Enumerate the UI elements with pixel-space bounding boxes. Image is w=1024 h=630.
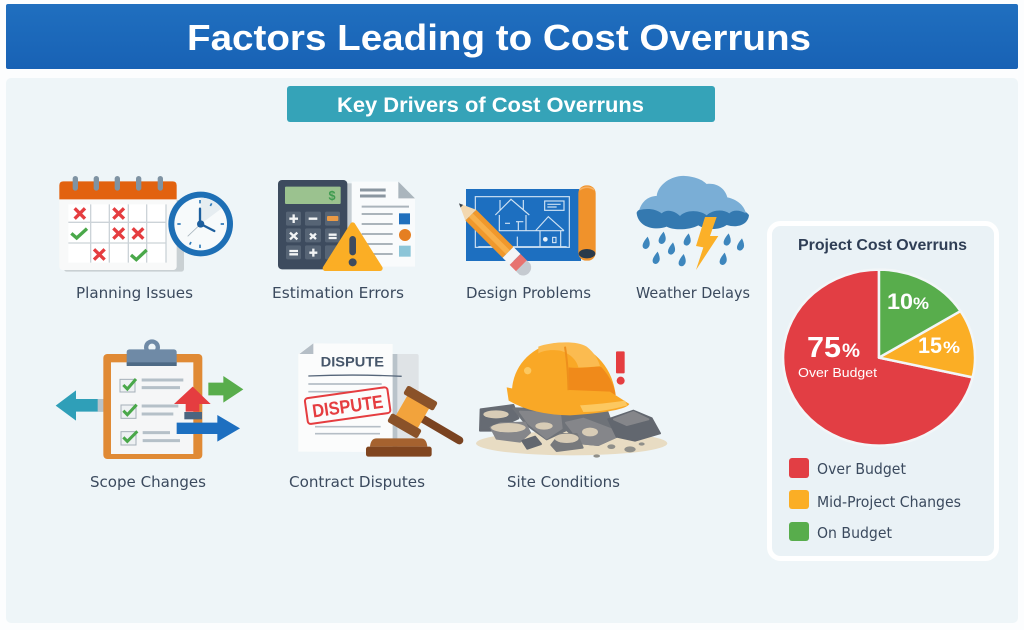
- panel: project cost overruns: [770, 224, 996, 558]
- value: 15%: [918, 333, 960, 358]
- value: 10%: 10: [887, 289, 913, 314]
- label: site conditions: Site Conditions: [507, 473, 620, 491]
- label: scope changes: Scope Changes: [90, 473, 206, 491]
- icon: contract disputes document and gavel: DISPUTE: [311, 391, 384, 421]
- legend: mid-project changes: Mid-Project Changes: [817, 493, 961, 511]
- icon: contract disputes document and gavel: DISPUTE: [321, 355, 384, 370]
- icon: planning issues calendar and clock: [59, 176, 233, 272]
- legend: over budget: [789, 458, 906, 478]
- value: 75% over budget: %: [842, 341, 860, 362]
- label: estimation errors: Estimation Errors: [272, 284, 404, 302]
- value: 75% over budget: [798, 332, 877, 380]
- icon: site conditions hard hat on rocks: [476, 342, 667, 458]
- section heading: key drivers: Key Drivers of Cost Overruns: [337, 94, 644, 117]
- header banner: [6, 4, 1018, 69]
- chart title: Project Cost Overruns: [798, 237, 967, 254]
- icon: estimation errors calculator and warning: [278, 180, 415, 269]
- label: design problems: Design Problems: [466, 284, 591, 302]
- value: 75% over budget: 75: [807, 332, 841, 364]
- title: Factors Leading to Cost Overruns: [187, 17, 811, 58]
- icon: contract disputes document and gavel: [298, 343, 459, 457]
- section heading: key drivers: [287, 86, 715, 122]
- value: 10%: [887, 289, 929, 314]
- value: 15%: %: [943, 338, 960, 357]
- pie chart: [783, 270, 975, 446]
- legend: on budget: [789, 522, 892, 542]
- legend: over budget: Over Budget: [817, 460, 906, 478]
- legend: on budget: On Budget: [817, 524, 892, 542]
- label: planning issues: Planning Issues: [76, 284, 193, 302]
- value: 10%: %: [913, 294, 929, 313]
- label: weather delays: Weather Delays: [636, 284, 750, 302]
- icon: design problems blueprint and pencil: [454, 185, 596, 279]
- legend: mid-project changes: [789, 490, 961, 511]
- label: contract disputes: Contract Disputes: [289, 473, 425, 491]
- value: 75% over budget: Over Budget: [798, 365, 877, 380]
- icon: estimation errors calculator and warning: $: [328, 189, 336, 203]
- value: 15%: 15: [918, 333, 942, 358]
- icon: scope changes clipboard and arrows: [56, 339, 243, 459]
- icon: weather delays storm cloud: [637, 176, 749, 270]
